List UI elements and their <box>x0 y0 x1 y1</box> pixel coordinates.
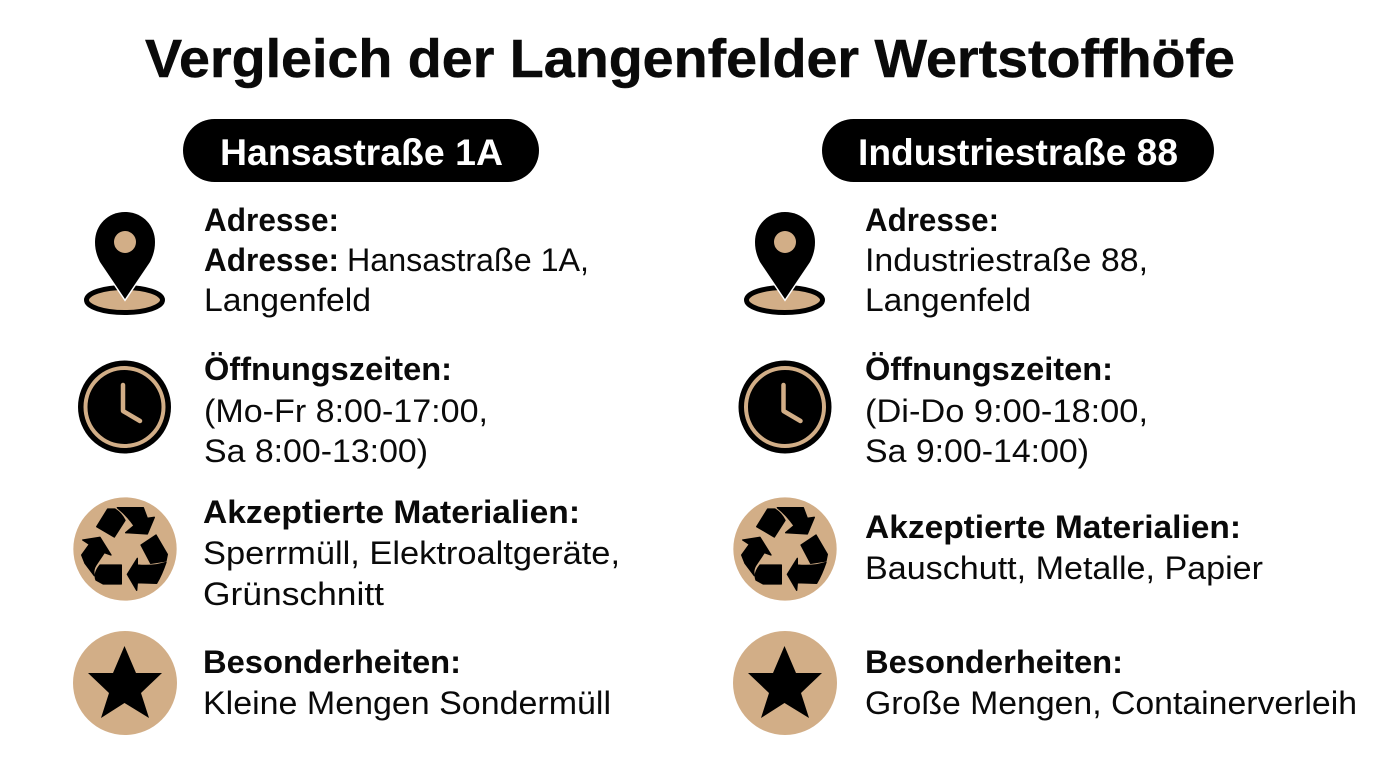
text: special features <box>865 644 1357 721</box>
panel: Hansastraße 1A <box>73 119 620 735</box>
text: accepted materials: Akzeptierte Materialien: <box>865 509 1241 545</box>
heading pill: Industriestraße 88: Industriestraße 88 <box>858 132 1178 173</box>
text: opening hours: Öffnungszeiten: <box>204 351 452 387</box>
text: accepted materials <box>203 494 620 612</box>
text: opening hours: Sa 8:00-13:00) <box>204 433 428 469</box>
text: opening hours <box>204 351 488 469</box>
title: Vergleich der Langenfelder Wertstoffhöfe <box>145 29 1235 89</box>
text: address: Hansastraße 1A, <box>347 242 589 278</box>
text: opening hours: Öffnungszeiten: <box>865 351 1113 387</box>
text: accepted materials: Sperrmüll, Elektroaltgeräte, <box>203 535 620 571</box>
panel: Industriestraße 88 <box>733 119 1357 735</box>
text: address <box>865 202 1148 318</box>
text: accepted materials: Grünschnitt <box>203 576 384 612</box>
icon: star <box>73 631 177 735</box>
text: accepted materials: Bauschutt, Metalle, Papier <box>865 550 1263 586</box>
text: opening hours: Sa 9:00-14:00) <box>865 433 1089 469</box>
text: special features: Kleine Mengen Sondermüll <box>203 685 611 721</box>
text: special features: Besonderheiten: <box>865 644 1123 680</box>
icon: recycling <box>733 497 837 601</box>
icon: location pin <box>746 212 822 312</box>
icon: clock <box>78 360 171 454</box>
icon: clock <box>738 360 832 454</box>
icon: recycling <box>73 497 177 601</box>
text: address: Langenfeld <box>865 282 1031 318</box>
text: address: Industriestraße 88, <box>865 242 1148 278</box>
icon: star <box>733 631 837 735</box>
icon: location pin <box>86 212 162 312</box>
text: address: Adresse: <box>865 202 999 238</box>
text: opening hours: (Mo-Fr 8:00-17:00, <box>204 393 488 429</box>
text: special features: Große Mengen, Containerverleih <box>865 685 1357 721</box>
text: opening hours <box>865 351 1148 469</box>
text: special features <box>203 644 611 721</box>
text: accepted materials: Akzeptierte Materialien: <box>203 494 580 530</box>
text: address: Langenfeld <box>204 282 371 318</box>
heading pill: Hansastraße 1A <box>183 119 539 182</box>
text: address <box>204 202 589 318</box>
text: accepted materials <box>865 509 1263 586</box>
text: address: Adresse: <box>204 202 339 238</box>
text: opening hours: (Di-Do 9:00-18:00, <box>865 393 1148 429</box>
heading pill: Hansastraße 1A: Hansastraße 1A <box>220 132 503 173</box>
text: special features: Besonderheiten: <box>203 644 461 680</box>
text: address: Adresse: <box>204 242 339 278</box>
heading pill: Industriestraße 88 <box>822 119 1214 182</box>
